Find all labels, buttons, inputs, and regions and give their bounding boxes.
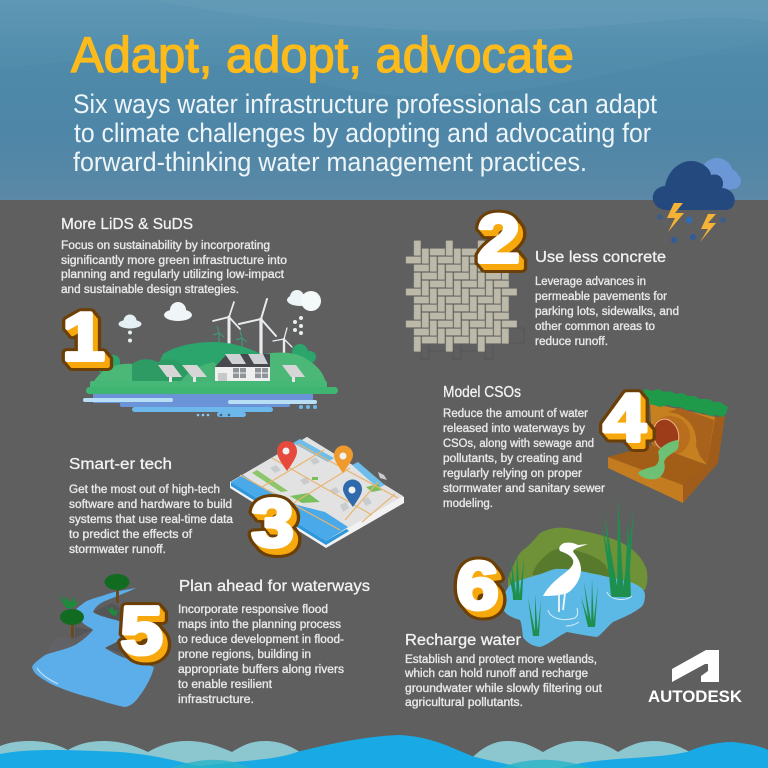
number 1: 1 [65,303,107,378]
text: concrete description: parking lots, sidewalks, and [535,306,679,318]
number 6: 6 [456,549,499,624]
text: waterways description: infrastructure. [178,694,254,706]
text: LiDS description: planning and regularly utilizing low-impact [61,269,285,281]
text: CSO description: pollutants, by creating and [443,453,582,465]
number 2: 2 [477,202,520,277]
subtitle: Six ways water infrastructure professionals can adapt [73,89,657,119]
text: tech description: to predict the effects of [69,529,193,541]
text: tech description: software and hardware to build [69,499,232,511]
panel: Smart-er tech [69,456,234,556]
illustration: river with trees [32,574,154,707]
text: CSO description: modeling. [443,498,493,510]
number 4: 4 [606,384,648,459]
heading: Model CSOs: Model CSOs [443,384,521,401]
text: CSO description: CSOs, along with sewage and [443,438,594,450]
icon: storm cloud [653,158,741,243]
number 1: 1 [62,300,105,375]
text: concrete description: Leverage advances in [535,276,646,288]
text: LiDS description: Focus on sustainability by incorporating [61,240,270,252]
text: waterways description: to enable resilient [178,679,273,691]
number 3: 3 [256,492,299,567]
number 6: 6 [460,553,502,628]
number 2: 2 [482,208,525,283]
illustration: isometric city map with pins [230,437,404,548]
number 5: 5 [125,600,168,675]
panel: More LiDS & SuDS [61,216,287,296]
text: tech description: Get the most out of high-tech [69,484,220,496]
illustration: combined sewer outfall soil block [608,389,728,503]
text: wetlands description [404,654,603,709]
number 2: 2 [480,205,522,280]
text: wetlands description: agricultural pollutants. [405,697,523,709]
number 2: 2 [481,206,523,281]
panel: Model CSOs [443,384,605,510]
number 3: 3 [251,486,294,561]
number 2: 2 [482,208,525,283]
number 2: 2 [477,202,520,277]
subtitle [73,89,657,177]
logo: Autodesk: AUTODESK [648,687,743,706]
text: waterways description: Incorporate responsive flood [178,604,328,616]
number 3: 3 [256,492,299,567]
text: concrete description: permeable pavements for [535,291,667,303]
illustration: permeable pavers [405,240,524,359]
number 1: 1 [64,302,106,377]
header band [0,0,768,200]
text: waterways description: maps into the planning process [178,619,341,631]
number 1: 1 [67,306,110,381]
number 5: 5 [124,598,166,673]
number 4: 4 [608,387,651,462]
text: tech description [69,484,234,556]
number 5: 5 [123,597,165,672]
text: LiDS description: significantly more green infrastructure into [61,255,287,267]
text: LiDS description: and sustainable design strategies. [61,284,239,296]
number 6: 6 [459,552,501,627]
text: CSO description [443,408,605,510]
number 6: 6 [458,551,500,626]
heading: Plan ahead for waterways: Plan ahead for waterways [179,578,370,595]
text: waterways description: appropriate buffers along rivers [178,664,344,676]
subtitle: to climate challenges by adopting and advocating for [74,118,651,148]
panel: Plan ahead for waterways [178,578,370,706]
text: concrete description: other common areas to [535,321,655,333]
number 4: 4 [608,387,651,462]
text: tech description: stormwater runoff. [69,544,166,556]
heading: Use less concrete: Use less concrete [535,249,666,266]
number 6: 6 [456,549,499,624]
text: CSO description: stormwater and sanitary sewer [443,483,605,495]
heading: Recharge water: Recharge water [405,632,521,649]
number 1: 1 [67,306,110,381]
text: wetlands description: which can hold runoff and recharge [404,668,588,680]
subtitle: forward-thinking water management practices. [73,147,587,177]
text: waterways description: prone regions, building in [178,649,311,661]
number 6: 6 [461,555,504,630]
house [215,354,270,367]
text: concrete description: reduce runoff. [535,336,608,348]
number 5: 5 [120,594,163,669]
number 4: 4 [605,383,647,458]
number 3: 3 [253,488,295,563]
number 4: 4 [603,381,646,456]
text: LiDS description [61,240,287,296]
number 4: 4 [607,385,649,460]
title: Adapt, adopt, advocate [71,27,574,83]
number 3: 3 [251,486,294,561]
text: wetlands description: Establish and protect more wetlands, [405,654,597,666]
turbines [213,299,292,356]
number 5: 5 [120,594,163,669]
text: CSO description: regularly relying on proper [443,468,582,480]
text: waterways description: to reduce development in flood- [178,634,344,646]
heading: Smart-er tech: Smart-er tech [69,456,172,473]
illustration: green island with turbines and solar [83,290,338,417]
number 3: 3 [255,490,297,565]
text: waterways description [178,604,344,706]
text: concrete description [535,276,679,348]
clouds [118,320,142,328]
number 4: 4 [603,381,646,456]
illustration: wetland pond with heron [503,497,647,647]
number 3: 3 [254,489,296,564]
heading: More LiDS & SuDS: More LiDS & SuDS [61,216,193,233]
solar panels [158,365,182,377]
text: CSO description: Reduce the amount of water [443,408,588,420]
number 1: 1 [62,300,105,375]
number 5: 5 [122,596,164,671]
panel: Recharge water [404,632,603,709]
number 6: 6 [461,555,504,630]
text: tech description: systems that use real-time data [69,514,234,526]
logo: Autodesk [648,650,743,706]
bottom waves [0,735,768,768]
text: wetlands description: groundwater while slowly filtering out [405,683,603,695]
number 1: 1 [66,304,108,379]
text: CSO description: released into waterways by [443,423,585,435]
panel: Use less concrete [535,249,679,348]
number 5: 5 [125,600,168,675]
number 2: 2 [479,204,521,279]
